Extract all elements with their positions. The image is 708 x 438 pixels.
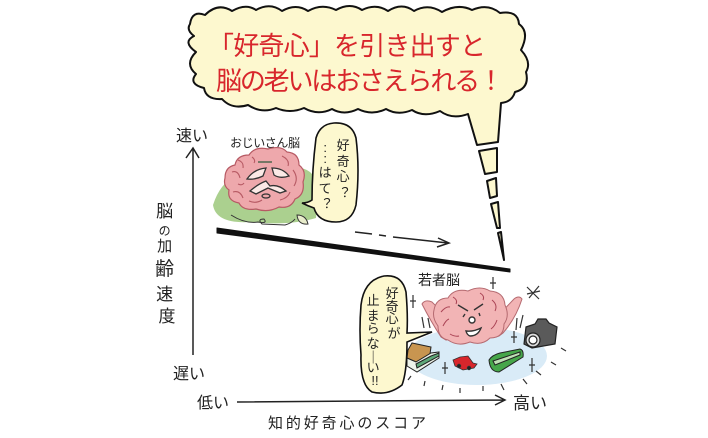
bubble outline [302,123,358,222]
bubble text: left column: : [323,151,327,166]
bubble text: left column: !! [371,373,379,388]
vertical axis title: 度 [158,307,176,326]
icon: red car [453,356,477,370]
bubble text: left column: : [323,140,327,155]
bubble text: right column: ？ [338,185,352,200]
bubble outline [360,276,432,393]
tail fragments [479,148,504,260]
speech bubble: old brain [302,123,358,222]
bubble text: left column: ら [367,321,380,336]
brain wrinkles [441,293,497,336]
bubble text: left column: ｜ [367,350,380,365]
sparkles and motion marks [408,277,566,393]
bubble text: right column: 好 [386,286,399,301]
bubble text: left column: 止 [367,293,380,308]
brain wrinkles [232,156,296,202]
bubble text: left column: て [319,181,332,196]
vertical axis title: の [159,224,171,238]
vertical axis title: 脳 [156,202,173,221]
icon: green bus [489,349,523,372]
leaf [297,215,308,224]
bubble outline with tail [188,6,528,145]
title line 1: 「好奇心」を引き出すと [208,31,486,61]
old brain face [247,162,289,198]
young brain body [434,288,507,344]
horizontal axis title: 知的好奇心のスコア [268,415,426,432]
arms [422,297,522,340]
old brain body [224,148,304,211]
label: slow: 遅い [173,365,205,383]
bubble text: right column: 心 [337,169,350,184]
bubble text: right column: 奇 [337,154,350,169]
bubble text: right column: 好 [337,138,350,153]
label: high: 高い [513,394,547,413]
vertical axis title: 齢 [155,258,174,280]
bubble text: left column: い [367,360,380,375]
thick declining trend line [217,228,510,272]
bubble text: right column: 心 [386,311,399,326]
pale blue floor [407,327,547,385]
bubble text: left column: は [319,165,332,180]
old brain group [213,136,318,225]
label: low: 低い [197,394,229,412]
bubble text: left column: な [367,336,380,351]
bubble text: right column: 奇 [386,299,399,314]
stem and leaf [231,215,295,225]
speech bubble: young brain [360,276,432,393]
label: fast: 速い [176,127,208,145]
title line 2: 脳の老いはおさえられる！ [216,66,504,96]
icon: camera [524,319,557,348]
horizontal axis arrow [237,395,505,405]
vertical axis title: 速 [156,285,173,304]
dashed arrow [355,232,449,247]
label: young brain: 若者脳 [418,272,460,288]
bubble text: right column: が [387,326,401,341]
green ground [213,168,318,223]
icon: books [407,343,439,372]
label: old brain: おじいさん脳 [230,136,300,150]
young brain group [407,272,566,393]
bubble text: left column: ま [367,308,380,323]
young brain face [458,304,483,336]
title speech bubble [188,6,528,145]
vertical axis arrow [186,148,199,355]
vertical axis title: 加 [157,238,172,255]
bubble text: left column: ？ [320,196,334,211]
